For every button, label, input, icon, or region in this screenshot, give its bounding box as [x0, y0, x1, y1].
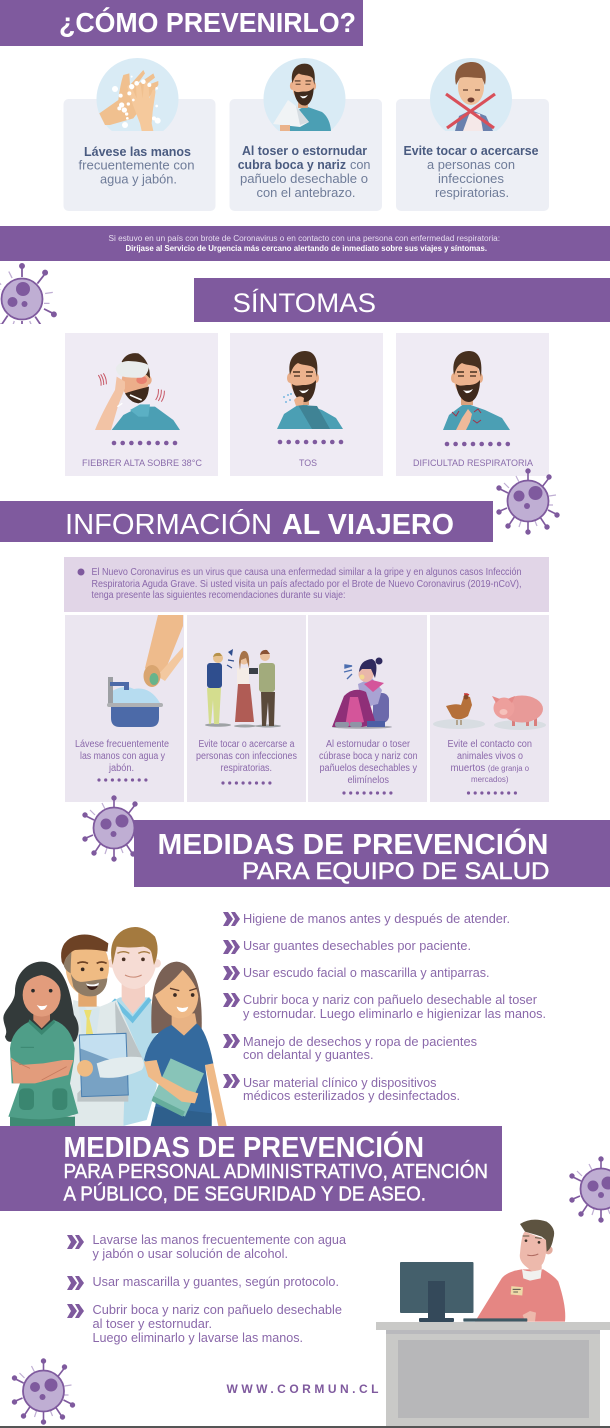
text: al toser: con [350, 157, 370, 172]
heading: medidas para personal administrativo: MEDIDAS DE PREVENCIÓN [64, 1130, 424, 1164]
text: muertos (de granja o [450, 763, 530, 774]
panel: lavado de manos [64, 58, 216, 211]
list: medidas personal administrativo: Cubrir boca y nariz con pañuelo desechable [92, 1303, 342, 1317]
icon: lavado en lavamanos [107, 615, 183, 727]
text: jabón. [108, 763, 134, 774]
text: al toser: con el antebrazo. [256, 185, 356, 200]
text: Evite el contacto con [448, 739, 532, 750]
text: evite tocar [404, 143, 538, 200]
icon: hombre con fiebre [95, 353, 180, 430]
text: Lávese frecuentemente [75, 739, 169, 750]
panel: evite el contacto con animales [430, 615, 549, 802]
woman with blue scrubs [144, 962, 227, 1126]
list: medidas equipo de salud: Cubrir boca y nariz con pañuelo desechable al toser [243, 993, 537, 1007]
heading: ¿Cómo prevenirlo?: ¿CÓMO PREVENIRLO? [59, 7, 356, 38]
panel: tos [230, 333, 383, 476]
illustration: equipo de salud [3, 927, 227, 1126]
text: animales vivos o [457, 751, 523, 762]
website url: WWW.CORMUN.CL [226, 1382, 378, 1396]
heading: medidas de prevención para equipo de salud: PARA EQUIPO DE SALUD [242, 858, 550, 885]
list: medidas equipo de salud: Usar escudo facial o mascarilla y antiparras. [243, 966, 490, 980]
text: al toser [238, 143, 370, 200]
text: evite tocar: respiratorias. [435, 185, 509, 200]
heading: medidas para personal administrativo: A PÚBLICO, DE SEGURIDAD Y DE ASEO. [64, 1182, 426, 1206]
heading: medidas de prevención para equipo de salud: MEDIDAS DE PREVENCIÓN [158, 827, 548, 861]
list: medidas personal administrativo: Lavarse las manos frecuentemente con agua [92, 1233, 346, 1247]
text: lávese las manos: frecuentemente con [78, 158, 194, 172]
text: evite tocar: a personas con [427, 157, 515, 172]
text: evite tocar: infecciones [438, 171, 504, 186]
icon: virus centro derecha [497, 469, 559, 534]
bearded doctor with coat [61, 934, 144, 1126]
heading: información al viajero: INFORMACIÓN [65, 508, 272, 541]
list: medidas equipo de salud: Higiene de manos antes y después de atender. [243, 912, 510, 926]
woman with green scrubs [3, 962, 79, 1126]
callout: aviso servicio de urgencia: Si estuvo en un país con brote de Coronavirus o en contacto con una persona con enfermedad respiratoria: [108, 234, 500, 243]
heading: medidas para personal administrativo [0, 1126, 502, 1211]
list: medidas equipo de salud: y estornudar. Luego eliminarlo e higienizar las manos. [243, 1007, 546, 1021]
text: evite tocar: Evite tocar o acercarse [404, 143, 538, 158]
list: medidas equipo de salud: Usar guantes desechables por paciente. [243, 939, 471, 953]
label: FIEBRER ALTA SOBRE 38°C [82, 458, 202, 469]
text: elimínelos [348, 775, 389, 786]
text: mercados) [471, 775, 509, 784]
text: las manos con agua y [80, 751, 165, 762]
illustration: recepcionista en escritorio [376, 1220, 610, 1426]
icon: mujer con manta estornudando [332, 658, 392, 729]
list: medidas personal administrativo: y jabón o usar solución de alcohol. [92, 1247, 288, 1261]
icon: manos con jabón [96, 58, 178, 131]
list: medidas equipo de salud: Manejo de desechos y ropa de pacientes [243, 1035, 477, 1049]
icon: virus derecho inferior [570, 1157, 610, 1222]
list: medidas personal administrativo: al toser y estornudar. [92, 1317, 212, 1331]
text: Evite tocar o acercarse a [198, 739, 295, 750]
text: personas con infecciones [196, 751, 297, 762]
text: pañuelos desechables y [320, 763, 417, 774]
panel: al estornudar o toser [308, 615, 427, 802]
panel: texto informativo [64, 557, 549, 612]
icon: persona enferma tachada [430, 58, 512, 131]
panel: al toser o estornudar [230, 58, 382, 211]
text: al toser: Al toser o estornudar [242, 143, 367, 158]
text: respiratorias. [220, 763, 272, 774]
dots [344, 791, 391, 795]
text: cúbrase boca y nariz con [319, 751, 418, 762]
panel: evite tocar [396, 58, 549, 211]
list: medidas equipo de salud [223, 912, 546, 1103]
text [319, 739, 418, 786]
text [196, 739, 297, 774]
heading: síntomas [194, 278, 610, 322]
heading: información al viajero [0, 501, 493, 542]
panel: texto informativo: El Nuevo Coronavirus es un virus que causa una enfermedad similar a la gripe y en algunos casos Infección [92, 567, 522, 578]
icon: virus inferior izquierdo [13, 1359, 74, 1424]
dots [445, 442, 510, 446]
panel: evite tocar o acercarse [187, 615, 306, 802]
icon: hombre con dificultad respiratoria [443, 351, 510, 430]
desk [376, 1322, 610, 1426]
text [75, 739, 169, 774]
list: medidas equipo de salud: con delantal y guantes. [243, 1048, 374, 1062]
icon: tres personas conversando [205, 649, 281, 728]
callout: aviso servicio de urgencia: Diríjase al Servicio de Urgencia más cercano alertando de inmediato sobre sus viajes y síntomas. [126, 244, 487, 253]
panel: fiebre [65, 333, 218, 476]
heading: información al viajero: AL VIAJERO [282, 509, 454, 541]
text: lávese las manos [78, 144, 194, 186]
callout: aviso servicio de urgencia [0, 226, 610, 261]
list: medidas personal administrativo: Luego eliminarlo y lavarse las manos. [92, 1331, 303, 1345]
text [448, 739, 532, 784]
man [463, 1220, 565, 1322]
text: al toser: cubra boca y nariz [238, 157, 346, 172]
list: medidas equipo de salud: médicos esterilizados y desinfectados. [243, 1089, 460, 1103]
dots [278, 440, 343, 444]
heading: ¿Cómo prevenirlo? [0, 0, 363, 46]
icon: virus superior izquierdo [0, 263, 57, 324]
panel: lávese frecuentemente [65, 615, 184, 802]
text: al toser: pañuelo desechable o [240, 171, 368, 186]
heading: medidas de prevención para equipo de salud [134, 820, 610, 887]
text: lávese las manos: agua y jabón. [100, 172, 177, 186]
heading: síntomas: SÍNTOMAS [232, 288, 376, 318]
dots [112, 441, 177, 445]
monitor [400, 1262, 474, 1322]
heading: medidas para personal administrativo: PARA PERSONAL ADMINISTRATIVO, ATENCIÓN [64, 1160, 488, 1183]
icon: gallina y cerdo [433, 694, 546, 730]
dots [468, 791, 516, 795]
label: TOS [299, 458, 317, 469]
list: medidas personal administrativo [67, 1233, 346, 1345]
icon: hombre estornudando en pañuelo [264, 58, 346, 131]
text: lávese las manos: Lávese las manos [84, 144, 191, 159]
text: Al estornudar o toser [326, 739, 411, 750]
label: DIFICULTAD RESPIRATORIA [413, 458, 534, 469]
list: medidas equipo de salud: Usar material clínico y dispositivos [243, 1076, 436, 1090]
list: medidas personal administrativo: Usar mascarilla y guantes, según protocolo. [92, 1275, 339, 1289]
panel: texto informativo: Respiratoria Aguda Grave. Si usted visita un país afectado por el Brote de Nuevo Coronavirus (2019-nCoV), [92, 579, 522, 590]
dots [223, 781, 270, 785]
panel: texto informativo: tenga presente las siguientes recomendaciones durante su viaje: [92, 590, 346, 601]
man with light blue scrubs [107, 927, 161, 1126]
dots [99, 778, 146, 782]
icon: hombre tosiendo [277, 351, 343, 429]
icon: virus sobre encabezado de salud [83, 796, 145, 861]
panel: dificultad respiratoria [396, 333, 549, 476]
